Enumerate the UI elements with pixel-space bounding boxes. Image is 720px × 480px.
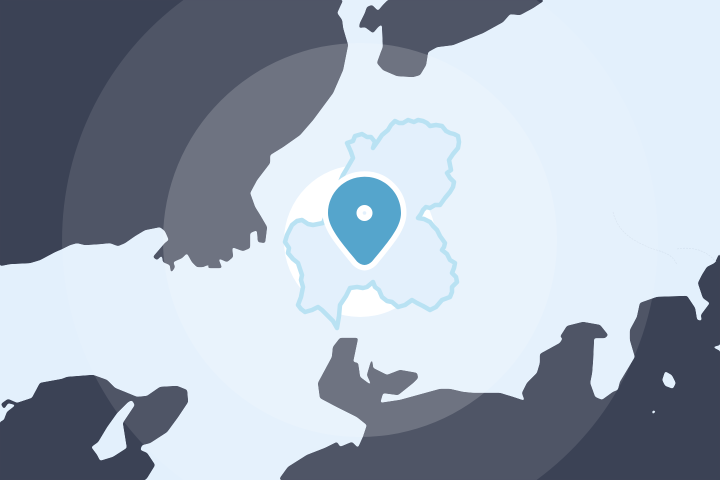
landmass: north-west coast <box>0 0 348 273</box>
middle range ring <box>163 43 557 437</box>
pin hole <box>356 205 372 221</box>
pin body <box>328 177 401 265</box>
faint coastline traces <box>613 212 716 265</box>
inner white circle <box>284 165 436 317</box>
landmass: south-west with lake <box>0 375 188 480</box>
landmass: northern peninsula <box>359 0 545 77</box>
location pin <box>328 177 401 265</box>
pin hole centre <box>363 211 366 215</box>
region outline <box>285 120 459 328</box>
landmass: southern coast with bays <box>280 252 720 480</box>
